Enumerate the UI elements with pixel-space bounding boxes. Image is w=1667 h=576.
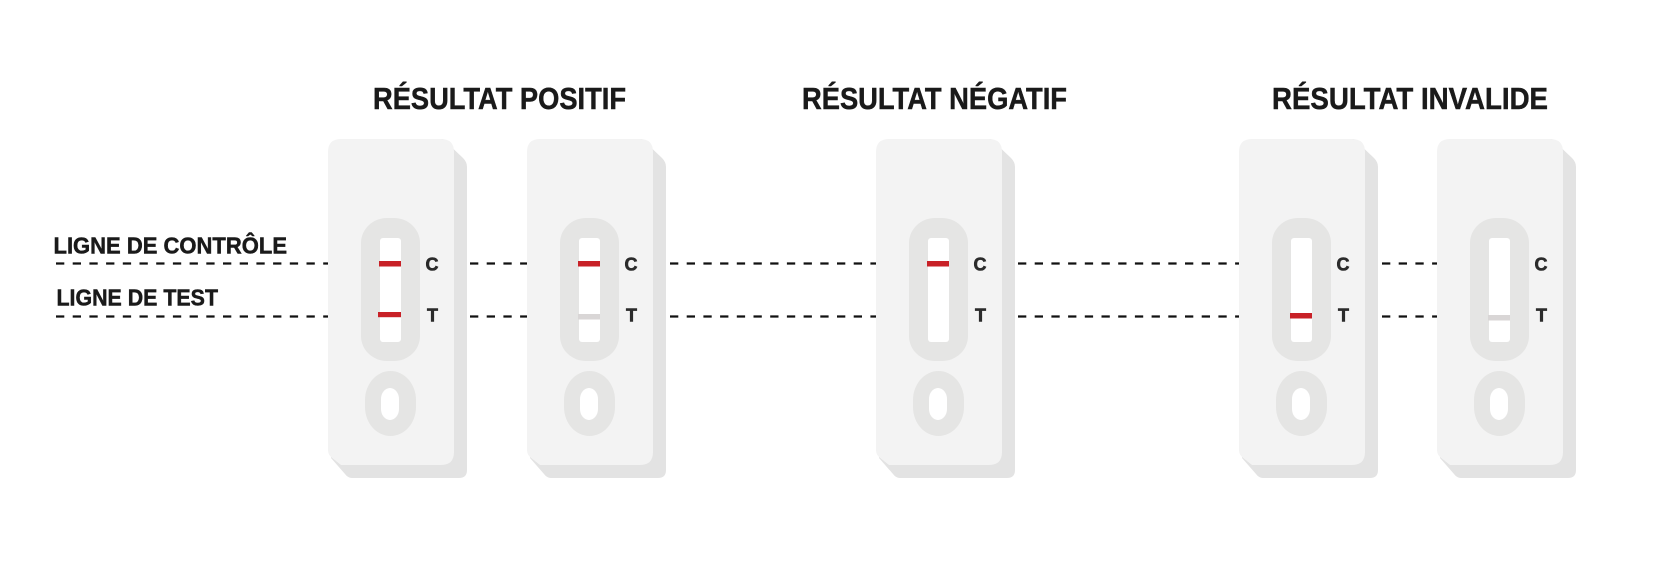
test cassette 3: negative: T: [975, 306, 986, 326]
test cassette 5: invalid, no coloured line: [1437, 139, 1576, 478]
dashed guide lines: [56, 264, 1437, 316]
test cassette 3: negative: [876, 139, 1015, 478]
test cassette 2: positive, control line only: C: [624, 254, 638, 274]
label: ligne de contrôle: LIGNE DE CONTRÔLE: [54, 232, 287, 258]
test cassette 5: invalid, no coloured line: C: [1534, 254, 1548, 274]
test cassette 3: negative: C: [974, 254, 986, 274]
test cassette 2: positive, control line only: T: [626, 306, 637, 326]
test cassette 4: invalid, test line only: C: [1336, 254, 1350, 274]
test cassette 1: positive, control and test lines: T: [427, 306, 438, 326]
title: résultat invalide: RÉSULTAT INVALIDE: [1272, 81, 1548, 116]
test cassette 4: invalid, test line only: T: [1338, 306, 1349, 326]
label: ligne de test: LIGNE DE TEST: [56, 284, 218, 310]
title: résultat positif: RÉSULTAT POSITIF: [373, 81, 626, 116]
test cassette 1: positive, control and test lines: C: [426, 254, 438, 274]
test cassette 4: invalid, test line only: [1239, 139, 1378, 478]
title: résultat négatif: RÉSULTAT NÉGATIF: [802, 81, 1067, 116]
test cassette 2: positive, control line only: [527, 139, 666, 478]
test cassette 1: positive, control and test lines: [328, 139, 467, 478]
test cassette 5: invalid, no coloured line: T: [1536, 306, 1547, 326]
